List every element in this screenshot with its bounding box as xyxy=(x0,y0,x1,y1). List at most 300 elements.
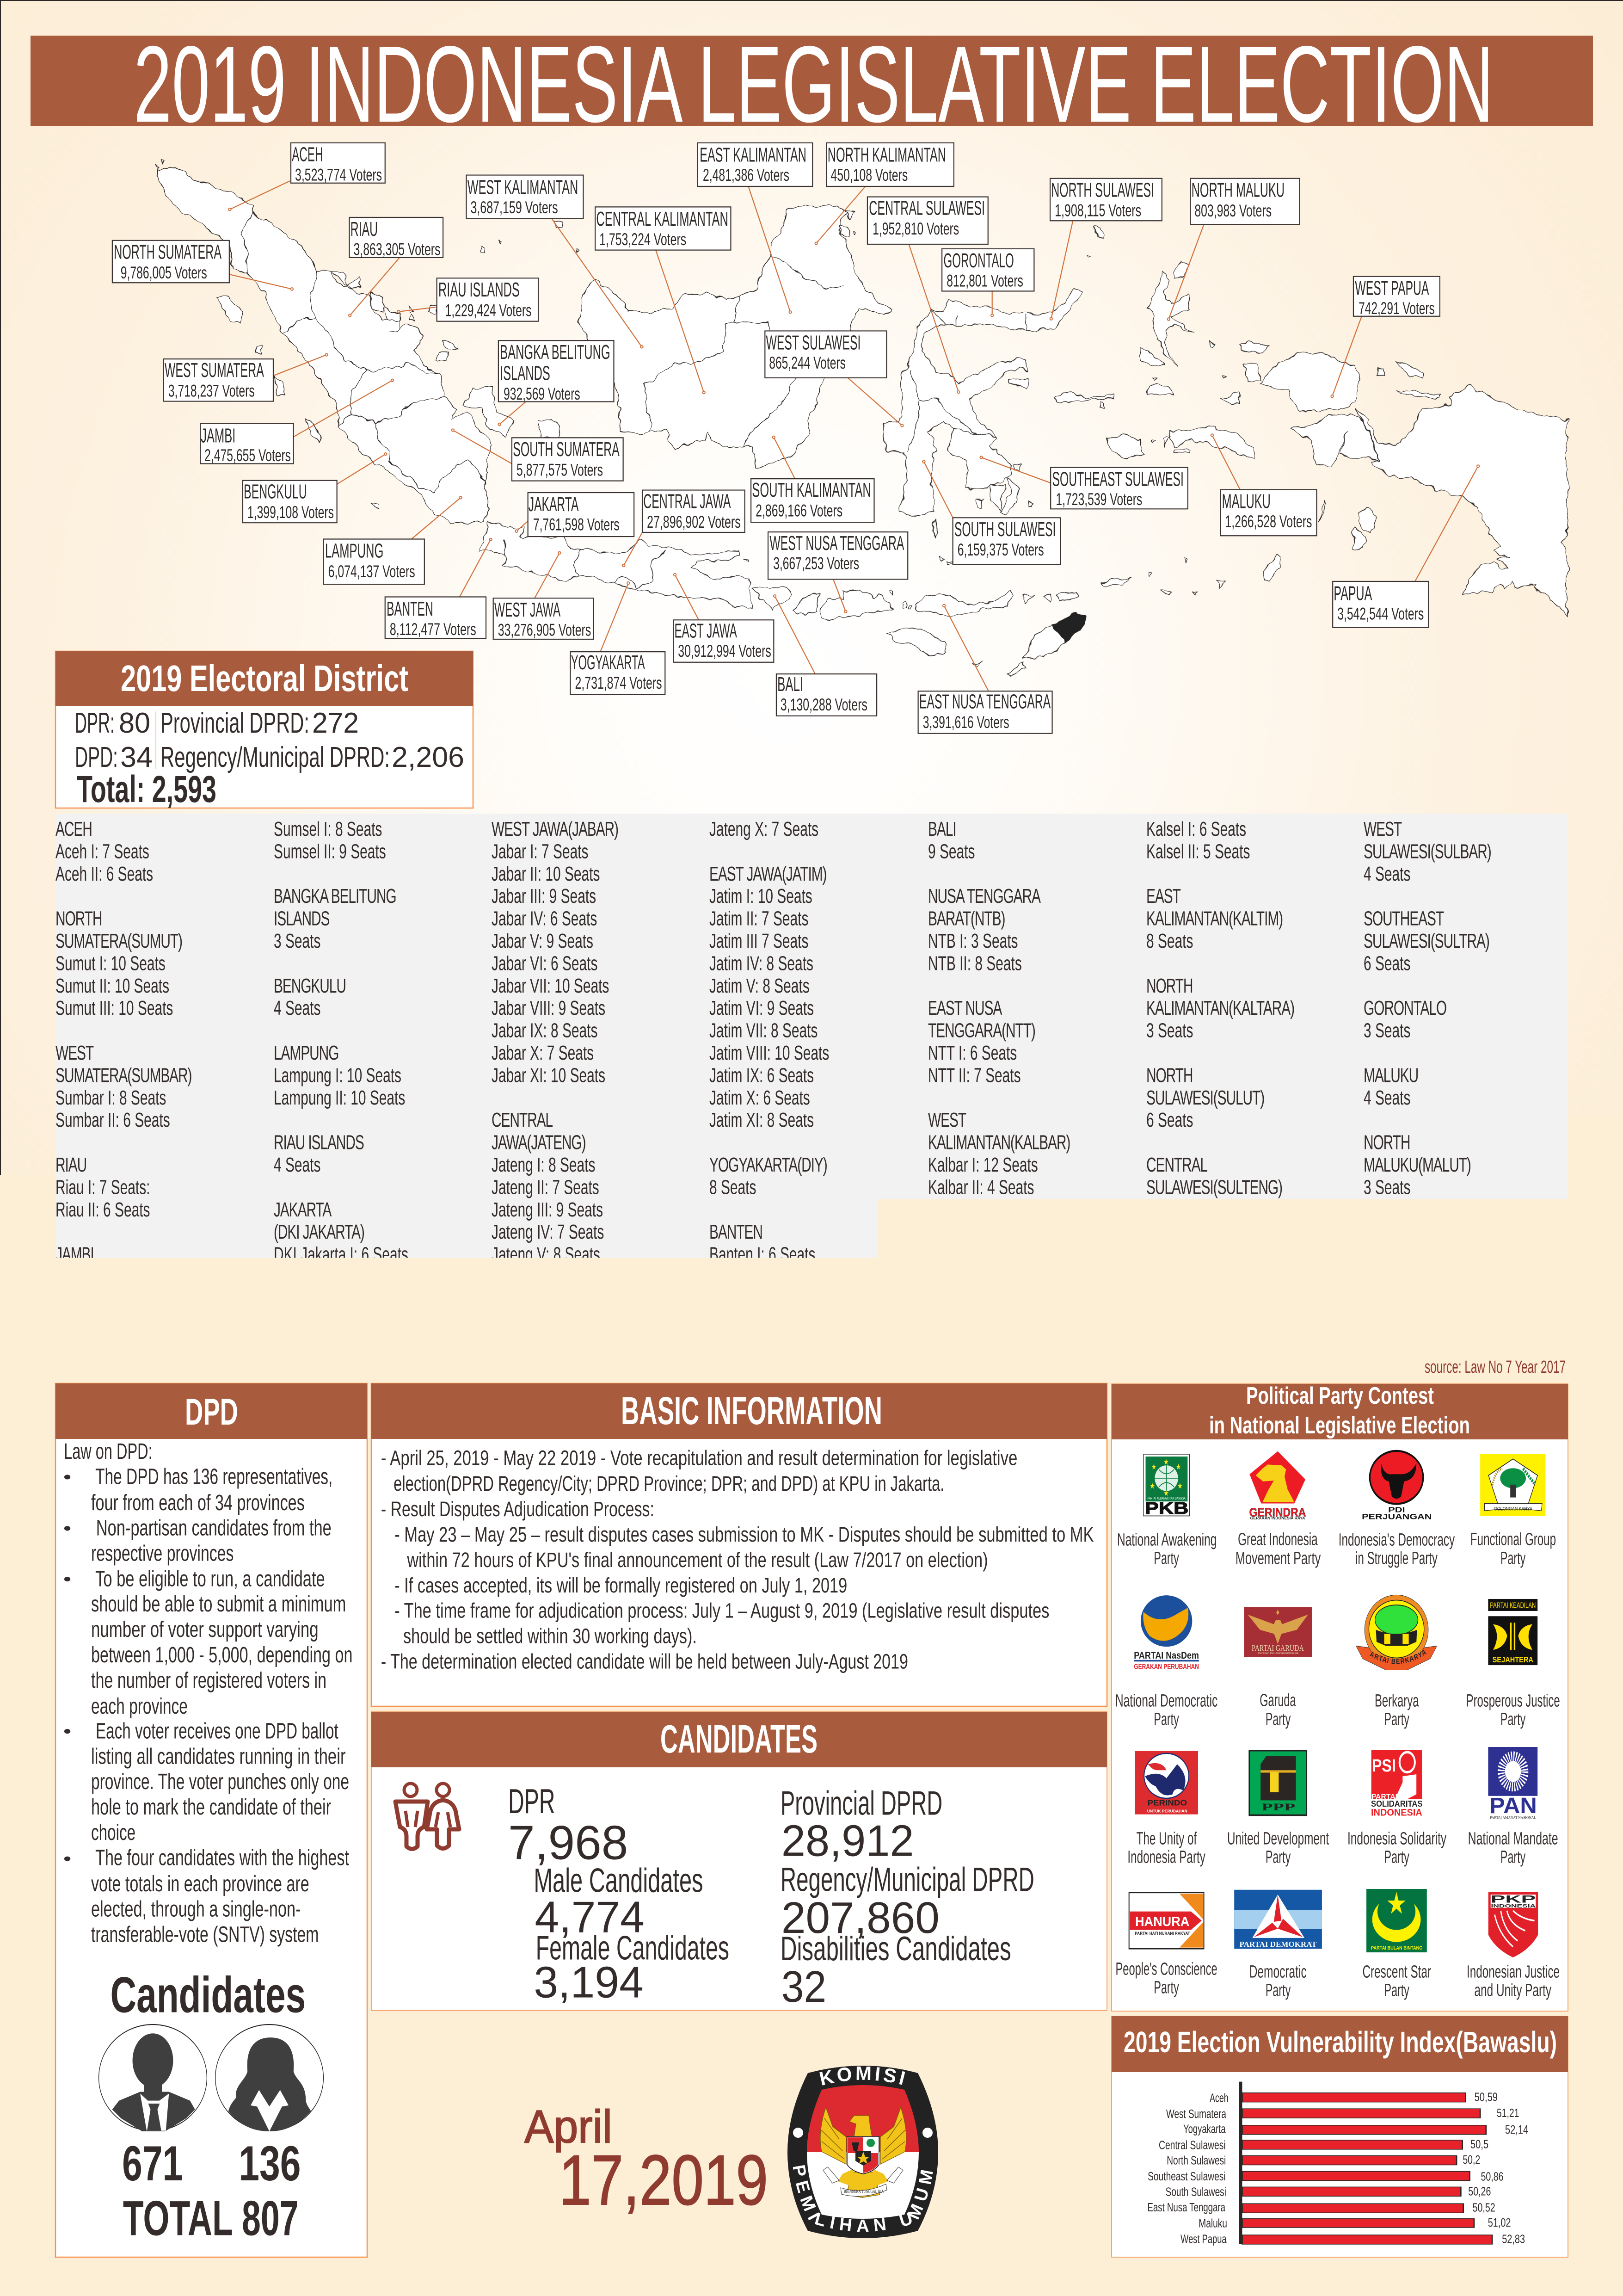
party names: Indonesian Justice xyxy=(1467,1962,1560,1982)
party: PBB: PARTAI BULAN BINTANG xyxy=(1371,1945,1423,1951)
bar chart: 51,02 xyxy=(1488,2216,1511,2229)
label: Papua xyxy=(1333,581,1428,628)
seats column 4: 8 Seats xyxy=(709,1176,756,1198)
seats column 3: Jateng VII: 7 Seats xyxy=(492,1288,609,1310)
DPD law text: between 1,000 - 5,000, depending on xyxy=(91,1642,352,1667)
label: North Kalimantan xyxy=(827,143,954,186)
bar chart: 50,5 xyxy=(1470,2137,1488,2151)
party: PKP Indonesia: INDONESIA xyxy=(1491,1903,1536,1908)
label: West Nusa Tenggara: 3,667,253 Voters xyxy=(773,554,859,573)
seats column 4 xyxy=(709,817,831,1310)
panel: basic information xyxy=(371,1383,1107,1706)
seat counts: 272 xyxy=(312,707,359,739)
label: West Sulawesi: WEST SULAWESI xyxy=(766,332,861,354)
heading: DPD: DPD xyxy=(185,1391,238,1433)
seats column 6 xyxy=(1146,817,1294,1355)
label: Maluku xyxy=(1220,490,1316,536)
party: PKP Indonesia xyxy=(1489,1893,1537,1957)
party names: Party xyxy=(1500,1549,1525,1568)
label: South Sumatera xyxy=(512,438,623,481)
party: Demokrat: PARTAI DEMOKRAT xyxy=(1239,1940,1317,1949)
party names: Functional Group xyxy=(1470,1530,1556,1549)
party names: People's Conscience xyxy=(1116,1959,1217,1979)
seats column 3: Jateng IX: 8 Seats xyxy=(492,1332,604,1355)
seats column 6: Sulsel I: 8 Seats xyxy=(1146,1288,1246,1310)
party: Hanura xyxy=(1129,1893,1204,1949)
label: Bengkulu: 1,399,108 Voters xyxy=(247,502,334,522)
seats column 6: CENTRAL xyxy=(1146,1153,1207,1176)
party: NasDem: GERAKAN PERUBAHAN xyxy=(1134,1662,1199,1671)
seats column 1: Aceh II: 6 Seats xyxy=(55,862,153,885)
seats column 3: Jabar VIII: 9 Seats xyxy=(492,996,605,1019)
label: Southeast Sulawesi xyxy=(1051,468,1188,509)
seats column 4: Jateng X: 7 Seats xyxy=(709,817,818,840)
party: PKP Indonesia: PKP xyxy=(1491,1894,1536,1905)
seats column 1: JAMBI xyxy=(55,1243,94,1265)
label: Bali xyxy=(776,673,877,716)
party: Berkarya: PARTAI BERKARYA xyxy=(1099,1363,1428,1666)
seat counts: DPR: xyxy=(75,707,115,739)
party names: National Awakening xyxy=(1117,1530,1217,1550)
party: PKB xyxy=(1143,1454,1189,1518)
seats column 3: Jateng VIII: 8 Seats xyxy=(492,1310,612,1333)
election date: April xyxy=(524,2101,612,2153)
province voter labels: SOUTH SUMATERA xyxy=(513,438,620,461)
candidate statistics: Male Candidates xyxy=(534,1862,703,1900)
candidate statistics: 7,968 xyxy=(508,1815,628,1869)
party: Gerindra: GERAKAN INDONESIA RAYA xyxy=(1250,1517,1305,1520)
icon: KPU emblem: PEMILIHAN UMUM xyxy=(788,2163,938,2236)
bar: South Sulawesi xyxy=(1166,2185,1491,2198)
seats column 4: Jatim VI: 9 Seats xyxy=(709,996,814,1019)
seats column 7: PAPUA xyxy=(1364,1220,1408,1243)
seats column 3: Jabar X: 7 Seats xyxy=(492,1041,594,1064)
label: Aceh: 3,523,774 Voters xyxy=(295,165,382,184)
label: Riau: 3,863,305 Voters xyxy=(353,240,441,259)
heading: candidates: CANDIDATES xyxy=(660,1717,818,1761)
candidate totals: 136 xyxy=(239,2136,301,2191)
seats column 7: MALUKU xyxy=(1364,1064,1418,1086)
seats column 4: Jatim II: 7 Seats xyxy=(709,907,808,930)
label: East Jawa: 30,912,994 Voters xyxy=(678,641,771,660)
seats column 2: DKI Jakarta III: 8 Seats xyxy=(274,1288,416,1310)
party: PKB: ★ xyxy=(1176,1463,1181,1471)
seats column 4: Banten III: 10 Seats xyxy=(709,1288,831,1310)
label: West Sumatera: 3,718,237 Voters xyxy=(168,381,255,401)
label: Maluku: 1,266,528 Voters xyxy=(1225,512,1312,531)
bar: Southeast Sulawesi xyxy=(1148,2170,1504,2183)
seats column 3: Jabar III: 9 Seats xyxy=(492,884,596,907)
candidate totals xyxy=(122,2136,301,2246)
candidate statistics: 3,194 xyxy=(534,1957,644,2007)
party: PSI: SOLIDARITAS xyxy=(1371,1799,1423,1809)
party names: Party xyxy=(1384,1847,1409,1867)
candidate totals: TOTAL 807 xyxy=(123,2191,299,2246)
seats column 2: LAMPUNG xyxy=(274,1041,338,1064)
bar chart: 50,59 xyxy=(1475,2090,1498,2104)
DPD law text: transferable-vote (SNTV) system xyxy=(91,1922,319,1947)
seats column 1: Riau I: 7 Seats: xyxy=(55,1176,150,1198)
seats column 2: JAKARTA xyxy=(274,1198,332,1221)
label: East Jawa: EAST JAWA xyxy=(674,620,737,642)
label: North Kalimantan: NORTH KALIMANTAN xyxy=(828,144,946,166)
province voter labels: SOUTH KALIMANTAN xyxy=(752,479,871,501)
label: West Sulawesi xyxy=(765,331,886,378)
party names: Indonesia Party xyxy=(1127,1847,1205,1867)
seats column 1: Riau II: 6 Seats xyxy=(55,1198,150,1221)
icon: KPU emblem: KOMISI xyxy=(818,2062,910,2090)
label: Papua: 3,542,544 Voters xyxy=(1337,604,1424,623)
seats column 5: NTB I: 3 Seats xyxy=(928,929,1018,952)
party: PAN xyxy=(1488,1747,1537,1820)
seats column 1 xyxy=(55,817,191,1355)
DPD law text: vote totals in each province are xyxy=(91,1871,309,1896)
seats column 4: Jatim VII: 8 Seats xyxy=(709,1019,818,1042)
seats column 2: DKI Jakarta II: 7 Seats xyxy=(274,1265,412,1288)
seats column 1: Sumbar II: 6 Seats xyxy=(55,1108,170,1131)
seats column 1: ACEH xyxy=(55,817,92,840)
candidate statistics: 207,860 xyxy=(781,1893,940,1943)
seats column 1: WEST xyxy=(55,1041,94,1064)
seats column 5: TENGGARA(NTT) xyxy=(928,1019,1035,1042)
seat counts: DPD: xyxy=(75,741,118,773)
label: Central Sulawesi: 1,952,810 Voters xyxy=(873,219,959,238)
seats column 5: Kalbar II: 4 Seats xyxy=(928,1176,1034,1198)
label: Riau Islands: 1,229,424 Voters xyxy=(445,301,532,320)
bar: Maluku xyxy=(1199,2216,1511,2230)
label: Bangka Belitung Islands: 932,569 Voters xyxy=(504,384,580,403)
seats column 7: 4 Seats xyxy=(1364,1086,1410,1109)
seats column 1: Sumut III: 10 Seats xyxy=(55,996,173,1019)
seats column 2 xyxy=(274,817,416,1310)
seats column 4: Jatim I: 10 Seats xyxy=(709,884,812,907)
seats column 5: SOUTH xyxy=(928,1310,974,1333)
basic information text: should be settled within 30 working days). xyxy=(403,1624,697,1648)
heading: vulnerability index xyxy=(1112,2016,1568,2072)
label: North Sulawesi xyxy=(1050,179,1162,221)
seats column 2: Sumsel II: 9 Seats xyxy=(274,840,386,863)
DPD law text: listing all candidates running in their xyxy=(91,1743,346,1769)
icon: female silhouette xyxy=(215,2024,323,2131)
label: Gorontalo: GORONTALO xyxy=(943,250,1014,272)
party names: Party xyxy=(1154,1978,1179,1998)
seat counts: Provincial DPRD: xyxy=(160,707,309,739)
infographic page: Disabilities Candidates xyxy=(781,1930,1011,1968)
party names: Indonesia Solidarity xyxy=(1347,1829,1446,1849)
seats column 6: 3 Seats xyxy=(1146,1019,1193,1042)
DPD law text: respective provinces xyxy=(91,1541,234,1566)
seats column 6: Sulsel II: 9 Seats xyxy=(1146,1310,1250,1333)
seat counts: 80 xyxy=(119,707,150,739)
seat counts: Regency/Municipal DPRD: xyxy=(160,741,390,773)
seats column 3: Jateng VI: 8 Seats xyxy=(492,1265,604,1288)
DPD law text: the number of registered voters in xyxy=(91,1667,326,1692)
party names: Democratic xyxy=(1249,1962,1307,1982)
label: Jakarta: JAKARTA xyxy=(529,494,579,516)
party: PSI: PSI xyxy=(1372,1756,1396,1776)
seats column 1: SUMATERA(SUMBAR) xyxy=(55,1064,191,1086)
province voter labels xyxy=(112,143,1440,734)
label: Banten: BANTEN xyxy=(387,598,433,620)
candidate statistics: DPR xyxy=(508,1782,555,1821)
party: PDI Perjuangan: PDI xyxy=(1388,1506,1405,1514)
party names: and Unity Party xyxy=(1475,1981,1551,2000)
label: Riau xyxy=(350,217,443,259)
seats column 5: KALIMANTAN(KALBAR) xyxy=(928,1131,1070,1154)
bar: Central Sulawesi: Central Sulawesi xyxy=(1159,2138,1226,2152)
party names: Party xyxy=(1266,1981,1291,2000)
seats column 5: BARAT(NTB) xyxy=(928,907,1005,930)
election date: 17,2019 xyxy=(559,2141,768,2220)
label: North Sumatera xyxy=(112,241,229,283)
province voter labels: SOUTH SULAWESI xyxy=(954,518,1056,541)
party: NasDem xyxy=(1134,1595,1199,1671)
seats column 7: 4 Seats xyxy=(1364,862,1410,885)
candidates count xyxy=(99,1966,323,2246)
seats column 2: DKI Jakarta I: 6 Seats xyxy=(274,1243,408,1265)
party names: Party xyxy=(1384,1710,1409,1729)
seats column 2: Lampung II: 10 Seats xyxy=(274,1086,405,1109)
seats column 4: Jatim V: 8 Seats xyxy=(709,974,810,997)
panel: seats per electoral district xyxy=(55,814,1568,1379)
province voter labels: BANGKA BELITUNG xyxy=(500,341,610,364)
seats column 7: WEST PAPUA xyxy=(1364,1288,1449,1310)
province voter labels: WEST NUSA TENGGARA xyxy=(769,532,904,555)
label: Bengkulu xyxy=(243,481,337,523)
seats column 3: Jabar V: 9 Seats xyxy=(492,929,593,952)
seats column 1: Sumut I: 10 Seats xyxy=(55,952,166,975)
seats column 6: 6 Seats xyxy=(1146,1108,1193,1131)
party names: Party xyxy=(1154,1710,1179,1729)
seats column 6: 7 Seats xyxy=(1146,1198,1193,1221)
party: Golkar: GOLONGAN KARYA xyxy=(1494,1506,1532,1512)
label: Riau: RIAU xyxy=(350,218,378,241)
party: PKB: PARTAI KEBANGKITAN BANGSA xyxy=(1147,1497,1186,1500)
label: West Papua: 742,291 Voters xyxy=(1359,298,1435,318)
bar chart: 50,2 xyxy=(1463,2153,1480,2166)
seats column 7: SULAWESI(SULBAR) xyxy=(1364,840,1491,863)
party: PAN: PAN xyxy=(1489,1793,1537,1818)
heading: political party contest: Political Party Contest xyxy=(1246,1383,1434,1409)
bar: Maluku: Maluku xyxy=(1199,2216,1227,2230)
party: Gerindra xyxy=(1249,1451,1306,1520)
label: Southeast Sulawesi: 1,723,539 Voters xyxy=(1056,489,1142,509)
icon: man and woman xyxy=(395,1784,459,1849)
seats column 7: NORTH xyxy=(1364,1131,1410,1154)
bar: East Nusa Tenggara: East Nusa Tenggara xyxy=(1147,2201,1225,2214)
DPD law text: The DPD has 136 representatives, xyxy=(95,1464,332,1489)
label: West Sulawesi: 865,244 Voters xyxy=(769,353,846,372)
panel: election vulnerability index xyxy=(1112,2016,1568,2257)
party: PKS xyxy=(1488,1599,1537,1665)
label: South Sulawesi xyxy=(953,518,1060,565)
party names: Party xyxy=(1154,1549,1179,1568)
seats column 7: SOUTHEAST xyxy=(1364,907,1444,930)
seats column 3: WEST JAWA(JABAR) xyxy=(492,817,618,840)
label: North Sumatera: 9,786,005 Voters xyxy=(121,263,207,282)
heading: basic information: BASIC INFORMATION xyxy=(621,1389,882,1432)
province voter labels: SOUTHEAST SULAWESI xyxy=(1052,468,1184,490)
election date xyxy=(524,2101,768,2220)
party: NasDem: PARTAI NasDem xyxy=(1134,1650,1199,1661)
garuda xyxy=(820,2107,906,2197)
party names: Indonesia's Democracy xyxy=(1339,1530,1455,1550)
seats column 6: Sulsel III: 7 Seats xyxy=(1146,1332,1254,1355)
seats column 6: NORTH xyxy=(1146,1064,1193,1086)
label: Gorontalo xyxy=(942,249,1034,291)
heading: political party contest xyxy=(1112,1383,1568,1439)
panel: election vulnerability index: 52,14 xyxy=(1505,2123,1528,2136)
label: Papua: PAPUA xyxy=(1334,582,1372,605)
bar: Yogyakarta: Yogyakarta xyxy=(1183,2122,1226,2136)
party: PBB xyxy=(1366,1889,1427,1952)
label: Yogyakarta: 2,731,874 Voters xyxy=(575,673,662,692)
bar: Central Sulawesi xyxy=(1159,2137,1488,2152)
label: South Kalimantan: 2,869,166 Voters xyxy=(756,501,842,520)
party: PKB: ★ xyxy=(1177,1482,1183,1491)
heading: basic information xyxy=(371,1383,1107,1439)
label: Central Jawa: CENTRAL JAWA xyxy=(643,490,731,512)
party: Perindo: PERINDO xyxy=(1147,1799,1187,1808)
seats column 3: Jateng IV: 7 Seats xyxy=(492,1220,604,1243)
party: PPP: PPP xyxy=(1261,1802,1295,1813)
label: West Jawa: WEST JAWA xyxy=(494,599,560,621)
seats column 4: Jatim III 7 Seats xyxy=(709,929,808,952)
label: Jakarta: 7,761,598 Voters xyxy=(533,515,620,534)
party: PSI xyxy=(1371,1750,1423,1818)
seats column 3: JAWA(JATENG) xyxy=(492,1131,585,1154)
seats column 4: Jatim VIII: 10 Seats xyxy=(709,1041,829,1064)
seats column 4: Banten I: 6 Seats xyxy=(709,1243,815,1265)
party names: Garuda xyxy=(1260,1691,1296,1710)
label: Maluku: MALUKU xyxy=(1222,490,1271,512)
DPD law text: choice xyxy=(91,1820,135,1845)
heading: electoral district xyxy=(55,651,473,706)
party: Garuda: PARTAI GARUDA xyxy=(1252,1643,1304,1653)
panel: DPD xyxy=(55,1383,367,2257)
label: West Nusa Tenggara xyxy=(768,532,908,579)
label: West Kalimantan: 3,687,159 Voters xyxy=(470,198,558,217)
bar: Yogyakarta xyxy=(1183,2122,1528,2136)
seats column 2: BENGKULU xyxy=(274,974,346,997)
bar chart: 50,52 xyxy=(1473,2201,1495,2214)
label: Central Sulawesi xyxy=(867,197,988,244)
party names: Prosperous Justice xyxy=(1466,1691,1560,1710)
seats column 6: SULAWESI(SULUT) xyxy=(1146,1086,1264,1109)
bar: Aceh xyxy=(1210,2090,1498,2105)
label: Gorontalo: 812,801 Voters xyxy=(947,271,1023,290)
seats column 1: Aceh I: 7 Seats xyxy=(55,840,149,863)
seats column 1: SUMATERA(SUMSEL) xyxy=(55,1332,189,1355)
seats column 6: SULAWESI(SULTENG) xyxy=(1146,1176,1282,1198)
label: Bangka Belitung Islands xyxy=(498,340,614,403)
label: Aceh xyxy=(291,143,385,184)
party: PKS: SEJAHTERA xyxy=(1493,1655,1533,1664)
party: Gerindra: GERINDRA xyxy=(1249,1506,1306,1519)
party names: Party xyxy=(1500,1847,1525,1867)
icon: KPU emblem xyxy=(787,2062,938,2238)
DPD law text xyxy=(64,1438,352,1947)
label: Bengkulu: BENGKULU xyxy=(244,481,307,503)
seats column 6: 8 Seats xyxy=(1146,929,1193,952)
seat counts xyxy=(75,707,464,773)
seats column 6: KALIMANTAN(KALTARA) xyxy=(1146,996,1294,1019)
panel: candidates: Provincial DPRD xyxy=(781,1784,942,1822)
DPD law text: province. The voter punches only one xyxy=(91,1769,349,1794)
bar: West Sumatera: West Sumatera xyxy=(1166,2107,1226,2121)
party: PDI Perjuangan xyxy=(1362,1451,1432,1521)
label: East Kalimantan xyxy=(698,143,812,186)
leader lines xyxy=(228,181,1479,691)
label: West Sumatera: WEST SUMATERA xyxy=(165,359,264,382)
Sumatra xyxy=(155,160,560,524)
basic information text: - Result Disputes Adjudication Process: xyxy=(381,1497,654,1521)
label: Lampung xyxy=(324,539,424,584)
party: PKB: ★ xyxy=(1163,1489,1169,1498)
party: Hanura: PARTAI HATI NURANI RAKYAT xyxy=(1135,1931,1190,1936)
label: Yogyakarta: YOGYAKARTA xyxy=(571,652,645,674)
Kalimantan xyxy=(555,206,890,469)
party: PAN: PARTAI AMANAT NASIONAL xyxy=(1490,1817,1536,1820)
label: Yogyakarta xyxy=(570,652,665,694)
party: Perindo: UNTUK PERUBAHAN xyxy=(1147,1809,1187,1814)
seats column 7: 6 Seats xyxy=(1364,952,1410,975)
seats column 3: Jateng II: 7 Seats xyxy=(492,1176,599,1198)
seats column 4: Jatim XI: 8 Seats xyxy=(709,1108,814,1131)
seats column 6: NORTH xyxy=(1146,974,1193,997)
seats column 2: Lampung I: 10 Seats xyxy=(274,1064,401,1086)
party names: National Mandate xyxy=(1468,1829,1558,1849)
seats column 3: Jabar IX: 8 Seats xyxy=(492,1019,597,1042)
DPD law text: number of voter support varying xyxy=(91,1617,319,1642)
seats column 2: ISLANDS xyxy=(274,907,330,930)
Maluku and Papua xyxy=(1055,262,1567,616)
candidate statistics: 28,912 xyxy=(781,1815,914,1865)
seats column 1: SUMATERA(SUMUT) xyxy=(55,929,182,952)
province voter labels: WEST KALIMANTAN xyxy=(467,176,578,198)
bar chart: 50,86 xyxy=(1481,2170,1504,2183)
label: West Jawa xyxy=(493,598,594,640)
seats column 6: Kalsel I: 6 Seats xyxy=(1146,817,1246,840)
party names: Berkarya xyxy=(1375,1691,1419,1710)
DPD law text: The four candidates with the highest xyxy=(95,1845,350,1870)
seats column 5: NTB II: 8 Seats xyxy=(928,952,1022,975)
party names: The Unity of xyxy=(1137,1829,1197,1849)
heading: DPD xyxy=(55,1383,367,1439)
DPD law text: Each voter receives one DPD ballot xyxy=(96,1718,338,1743)
label: Riau Islands xyxy=(437,278,538,321)
party: PSI: PARTAI xyxy=(1371,1792,1397,1801)
Java and Nusa Tenggara xyxy=(478,523,1086,676)
label: South Kalimantan xyxy=(751,479,874,522)
label: North Maluku xyxy=(1190,179,1300,224)
seats column 5: NUSA TENGGARA xyxy=(928,884,1041,907)
bar chart: 51,21 xyxy=(1497,2106,1519,2120)
label: Central Jawa xyxy=(642,490,745,532)
party: PKS: PARTAI KEADILAN xyxy=(1490,1602,1536,1610)
seats column 1: NORTH xyxy=(55,907,102,930)
label: Riau Islands: RIAU ISLANDS xyxy=(438,279,520,301)
seats column 5: EAST NUSA xyxy=(928,996,1002,1019)
seats column 1: 8 Seats xyxy=(55,1265,102,1288)
party names: Crescent Star xyxy=(1362,1962,1431,1982)
bar: South Sulawesi: South Sulawesi xyxy=(1166,2185,1226,2198)
label: Banten: 8,112,477 Voters xyxy=(390,619,476,639)
label: Jambi xyxy=(200,424,294,465)
label: East Kalimantan: 2,481,386 Voters xyxy=(703,165,789,185)
province voter labels: CENTRAL SULAWESI xyxy=(869,197,985,219)
party: PKB: PKB xyxy=(1145,1499,1188,1518)
